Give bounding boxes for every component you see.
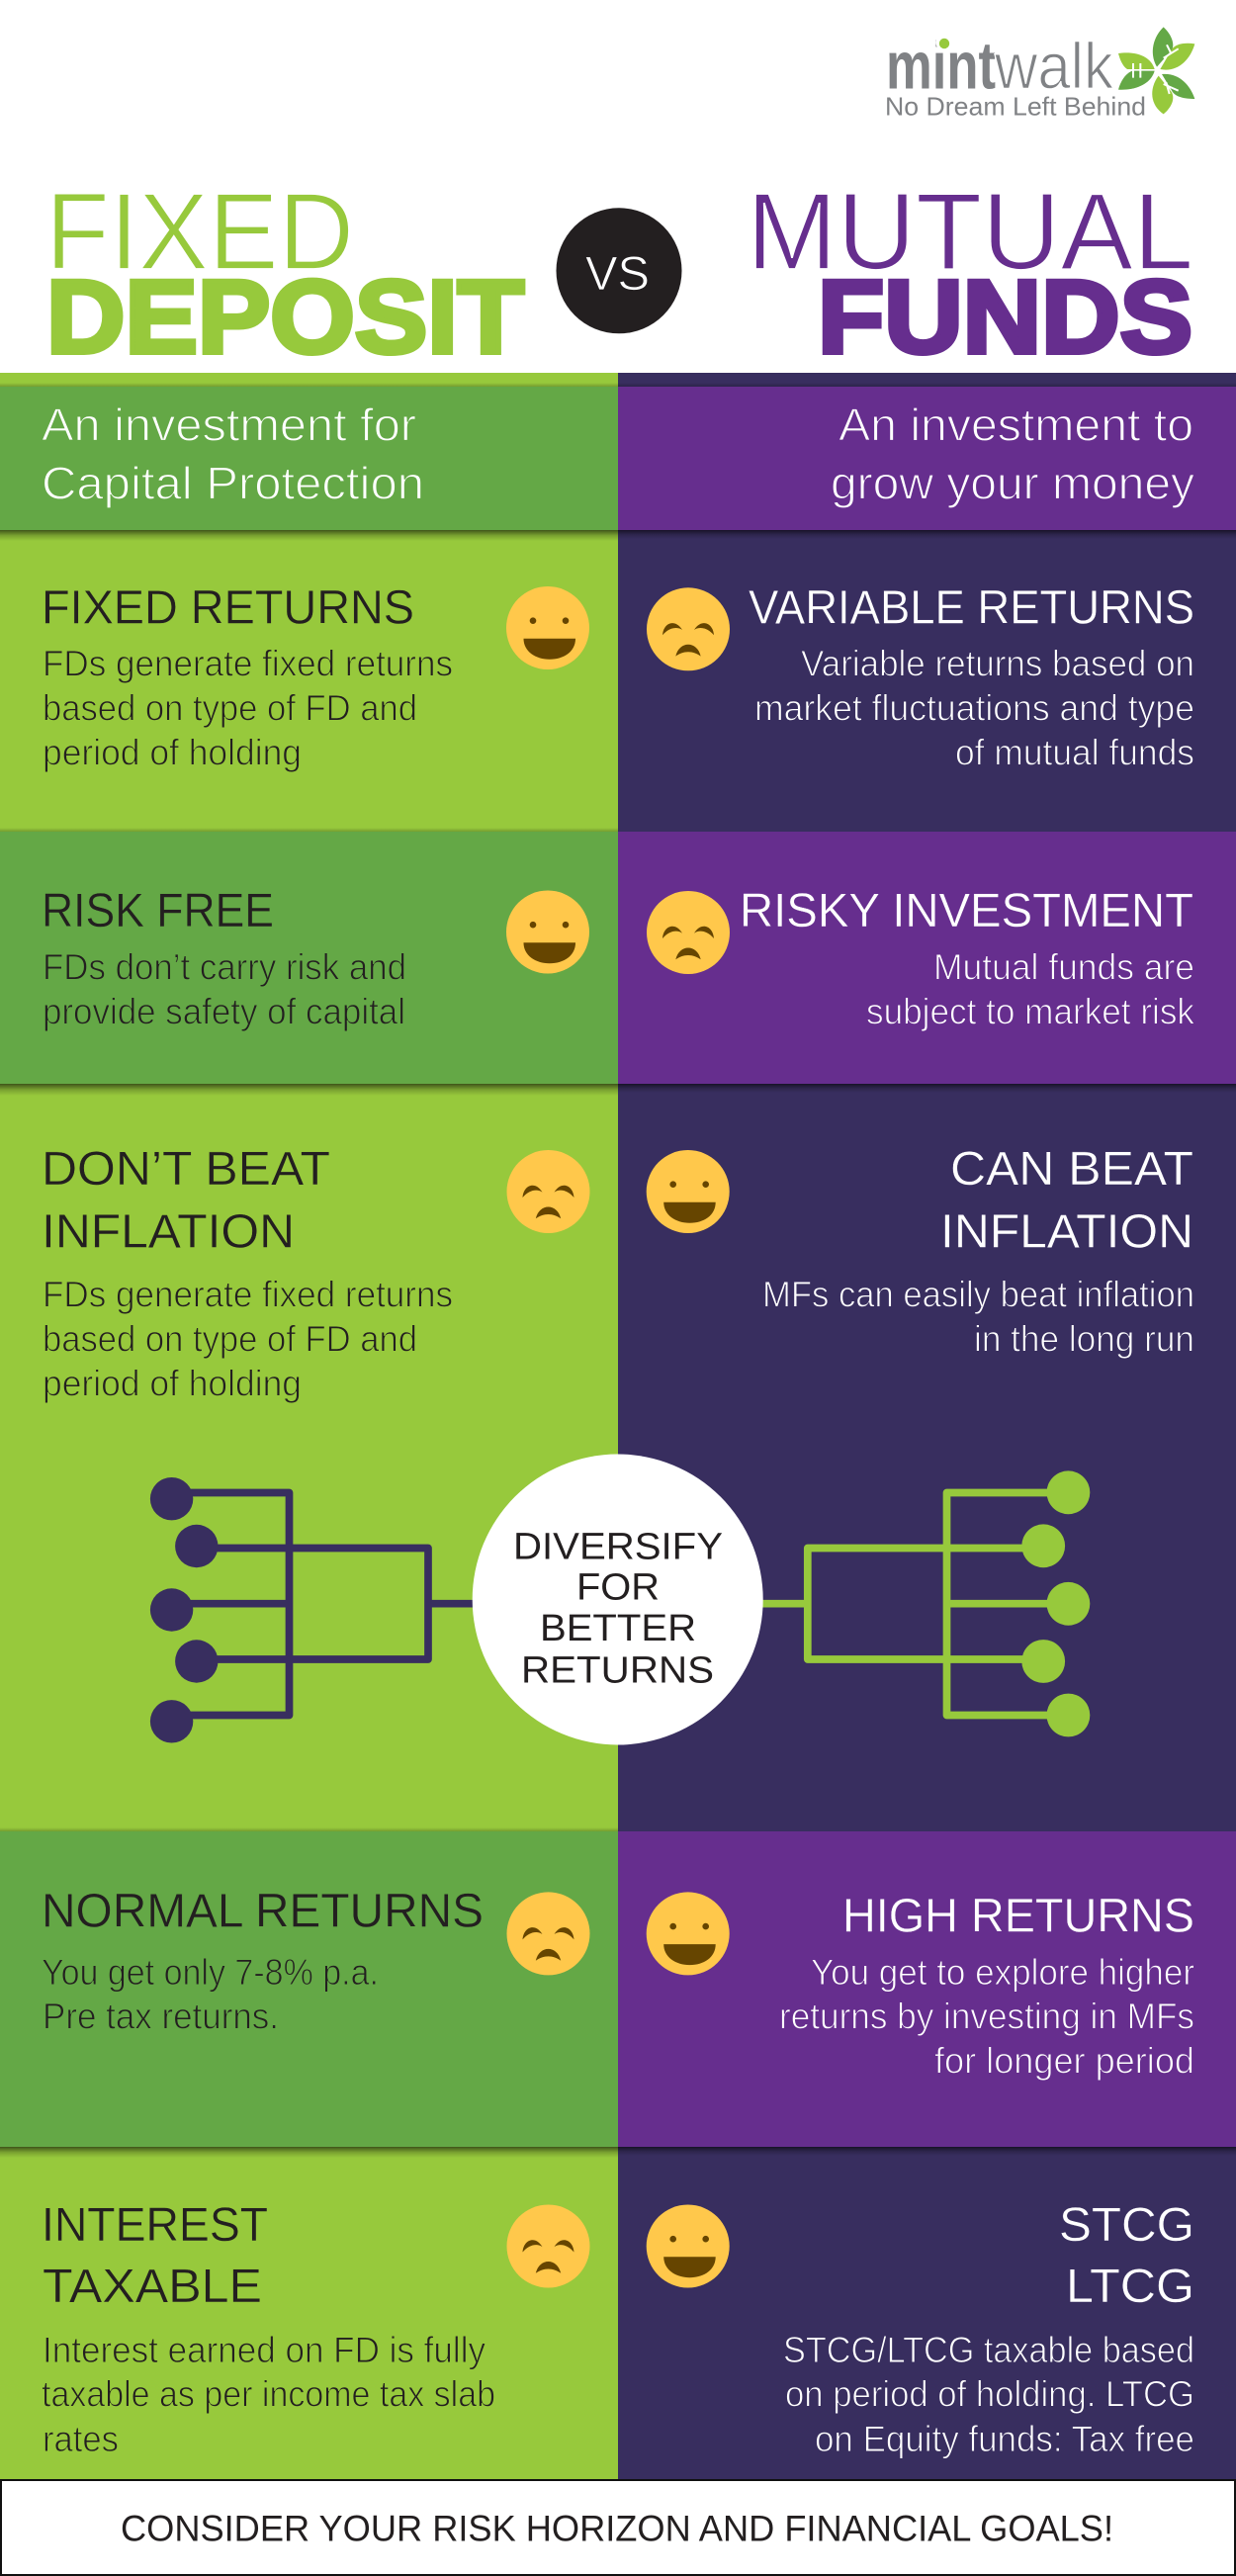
- body text: provide safety of capital: [43, 992, 405, 1032]
- icon: happy face: [506, 586, 589, 669]
- title: mutual funds: [747, 171, 1193, 376]
- title: fixed deposit: FIXED: [45, 171, 354, 293]
- icon: happy face: [647, 1150, 730, 1233]
- panel: risk free: [0, 832, 618, 1084]
- callout: diversify for better returns: BETTER: [540, 1608, 696, 1649]
- panel: high returns: [618, 1831, 1236, 2147]
- vs badge: VS: [585, 248, 650, 301]
- logo wordmark: [886, 28, 1114, 103]
- icon: happy face: [506, 890, 589, 973]
- tagline right: An investment to: [839, 399, 1193, 450]
- heading: VARIABLE RETURNS: [749, 582, 1194, 635]
- logo wordmark: walk: [994, 29, 1114, 102]
- body text: in the long run: [974, 1319, 1194, 1360]
- diagram: right branching tree: [761, 1470, 1090, 1736]
- body text: Interest earned on FD is fully: [43, 2330, 486, 2370]
- title: mutual funds: MUTUAL: [747, 171, 1193, 293]
- panel: grow your money tagline: [618, 373, 1236, 832]
- icon: sad face: [647, 587, 730, 670]
- heading: INFLATION: [42, 1206, 295, 1259]
- body text: market fluctuations and type: [754, 688, 1194, 729]
- body text: rates: [43, 2419, 119, 2459]
- title: mutual funds: FUNDS: [818, 259, 1192, 376]
- logo: mintwalk: [885, 27, 1194, 122]
- body text: of mutual funds: [955, 732, 1194, 772]
- panel: normal returns: [0, 1831, 618, 2147]
- icon: sad face: [647, 891, 730, 974]
- footer callout: [1, 2480, 1235, 2575]
- body text: STCG/LTCG taxable based: [783, 2330, 1194, 2370]
- body text: You get only 7-8% p.a.: [42, 1952, 379, 1993]
- body text: FDs don’t carry risk and: [43, 947, 406, 988]
- icon: happy face: [647, 1892, 730, 1975]
- heading: INTEREST: [42, 2199, 268, 2252]
- tagline left: An investment for: [42, 399, 416, 450]
- body text: on period of holding. LTCG: [785, 2374, 1194, 2415]
- body text: Variable returns based on: [801, 643, 1194, 684]
- heading: DON’T BEAT: [42, 1143, 330, 1196]
- title: fixed deposit: [45, 171, 524, 376]
- body text: Pre tax returns.: [43, 1997, 279, 2037]
- icon: happy face: [647, 2205, 730, 2288]
- panel: interest taxable: [0, 2147, 618, 2480]
- body text: MFs can easily beat inflation: [762, 1275, 1194, 1315]
- body text: FDs generate fixed returns: [43, 1275, 453, 1315]
- title: fixed deposit: DEPOSIT: [46, 259, 524, 376]
- body text: period of holding: [43, 1364, 302, 1404]
- heading: FIXED RETURNS: [42, 582, 414, 635]
- logo leaves icon: [1118, 27, 1194, 114]
- tagline left: Capital Protection: [42, 458, 424, 509]
- heading: TAXABLE: [43, 2261, 262, 2313]
- icon: sad face: [506, 1150, 589, 1233]
- panel: capital protection tagline: [0, 373, 618, 832]
- vs badge: [556, 208, 682, 333]
- callout: diversify for better returns: DIVERSIFY: [513, 1527, 723, 1568]
- body text: subject to market risk: [866, 992, 1194, 1032]
- body text: period of holding: [43, 732, 302, 772]
- heading: CAN BEAT: [950, 1143, 1193, 1196]
- logo tagline: No Dream Left Behind: [885, 92, 1146, 122]
- callout: diversify for better returns: RETURNS: [521, 1650, 714, 1692]
- body text: based on type of FD and: [43, 1319, 417, 1360]
- panel: variable returns: [647, 582, 1194, 772]
- panel: stcg ltcg: [618, 2147, 1236, 2480]
- body text: FDs generate fixed returns: [43, 643, 453, 684]
- heading: STCG: [1059, 2199, 1194, 2252]
- diagram: left branching tree: [150, 1477, 475, 1743]
- body text: You get to explore higher: [811, 1952, 1194, 1993]
- icon: sad face: [506, 2205, 589, 2288]
- icon: sad face: [506, 1892, 589, 1975]
- panel: can beat inflation: [618, 1084, 1236, 1831]
- panel: don't beat inflation: [0, 1084, 618, 1831]
- body text: based on type of FD and: [43, 688, 417, 729]
- heading: NORMAL RETURNS: [42, 1885, 484, 1937]
- footer callout: CONSIDER YOUR RISK HORIZON AND FINANCIAL GOALS!: [121, 2507, 1113, 2548]
- panel: fixed returns: [42, 582, 589, 772]
- logo wordmark: mint: [886, 28, 996, 103]
- heading: RISK FREE: [42, 885, 274, 937]
- heading: INFLATION: [940, 1206, 1193, 1259]
- body text: taxable as per income tax slab: [42, 2374, 495, 2415]
- callout: diversify for better returns: [473, 1454, 763, 1744]
- body text: Mutual funds are: [933, 947, 1194, 988]
- callout: diversify for better returns: FOR: [576, 1567, 660, 1609]
- body text: on Equity funds: Tax free: [815, 2419, 1194, 2459]
- heading: LTCG: [1066, 2261, 1194, 2313]
- body text: returns by investing in MFs: [779, 1997, 1194, 2037]
- tagline right: grow your money: [831, 458, 1194, 509]
- heading: HIGH RETURNS: [842, 1891, 1194, 1943]
- heading: RISKY INVESTMENT: [740, 885, 1193, 937]
- panel: risky investment: [618, 832, 1236, 1084]
- body text: for longer period: [934, 2041, 1194, 2082]
